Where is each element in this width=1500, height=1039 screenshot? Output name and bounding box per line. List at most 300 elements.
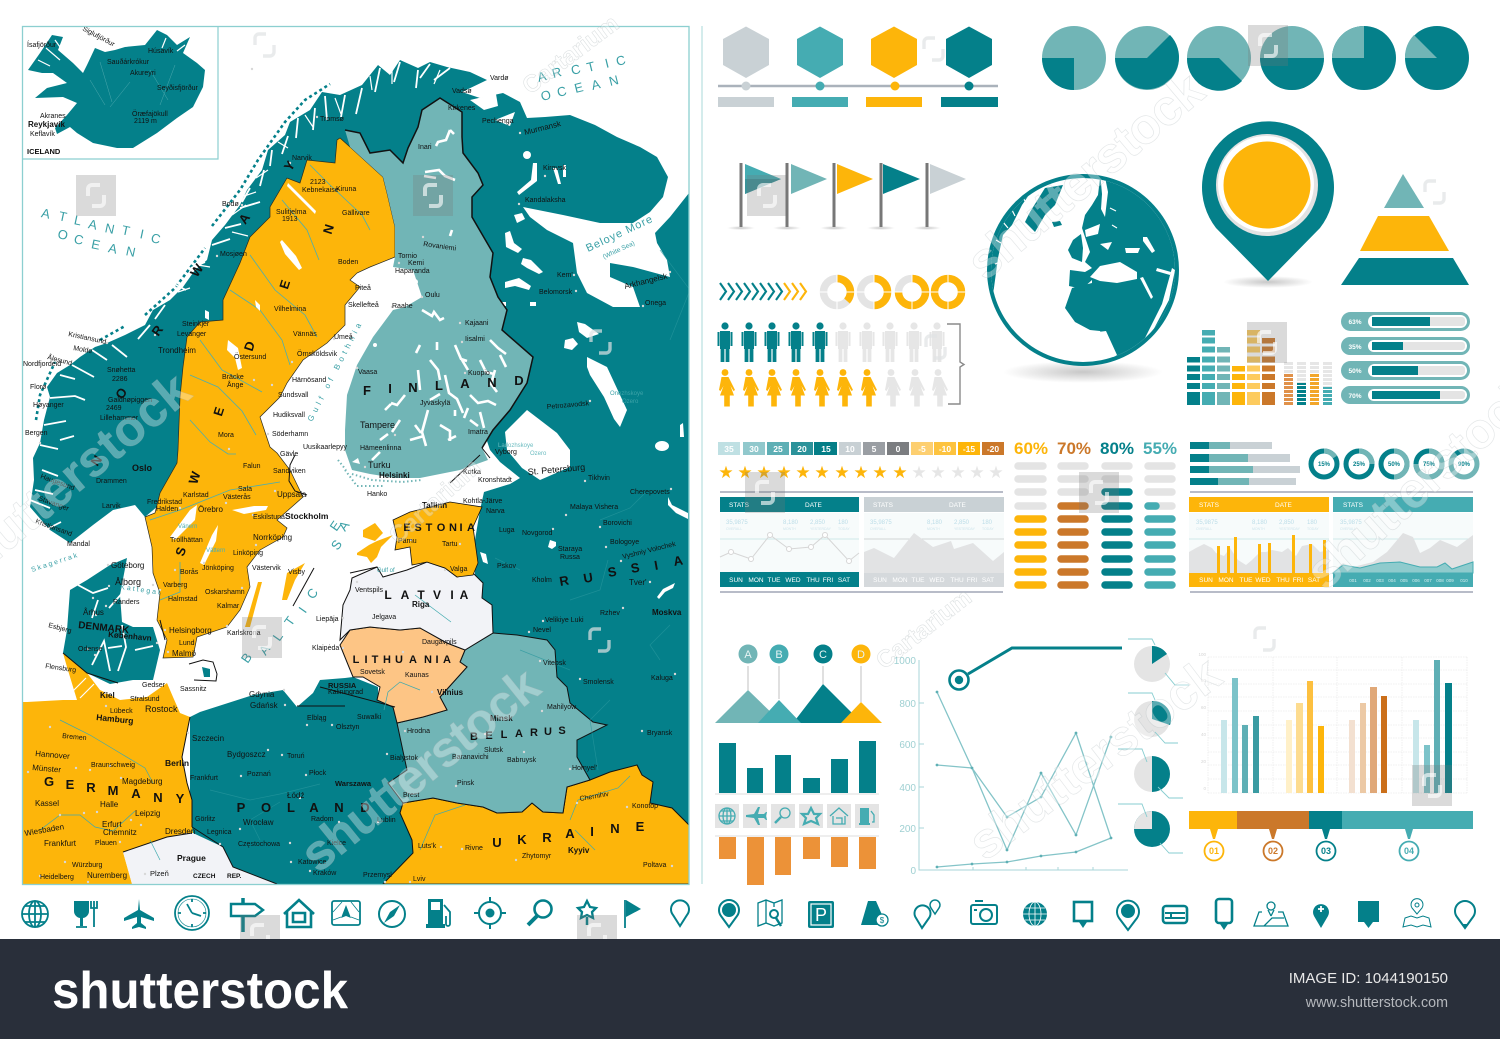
icon: pin outline xyxy=(671,900,689,926)
country labels: BELARUS xyxy=(470,725,566,743)
sea labels xyxy=(30,52,655,666)
city labels: Florø xyxy=(30,384,47,391)
inset labels: Seyðisfjörður xyxy=(157,84,199,92)
city labels: Härnösand xyxy=(292,377,326,384)
city labels: Warszawa xyxy=(335,779,372,788)
watermark: shutterstock xyxy=(958,645,1231,871)
temperature scale: 0 xyxy=(896,444,901,454)
vertical divider xyxy=(701,26,703,884)
inset frame xyxy=(23,27,218,159)
city labels: Plzeň xyxy=(150,869,169,878)
sea labels: BALTIC SEA xyxy=(238,518,353,666)
stat panel 1: line chart: OVERALL xyxy=(726,527,742,531)
Gotland and Oland xyxy=(245,563,305,627)
city labels: Velikiye Luki xyxy=(545,617,584,624)
city labels: Heidelberg xyxy=(40,874,74,881)
line chart xyxy=(894,648,1128,877)
city labels: Odense xyxy=(78,646,103,653)
progress bars: 35% xyxy=(1348,344,1362,351)
city labels: Høyanger xyxy=(33,402,64,409)
segmented timeline strip: 01 xyxy=(1209,846,1219,856)
globe shadow xyxy=(1003,361,1163,383)
city labels: Gdańsk xyxy=(250,701,279,710)
country labels: GERMANY xyxy=(44,774,185,806)
city labels: Nuremberg xyxy=(87,871,127,880)
star rating: ★★★★★★★★★★ xyxy=(718,463,908,482)
country labels: FINLAND xyxy=(363,373,524,398)
line chart: 400 xyxy=(899,783,916,794)
city labels: Eskilstuna xyxy=(253,514,285,521)
city labels: Falun xyxy=(243,463,261,470)
icon: folded map with magnifier xyxy=(758,900,782,926)
segmented timeline strip xyxy=(1189,811,1473,860)
city labels: Kemi xyxy=(408,260,424,267)
city labels: Staraya xyxy=(558,546,582,553)
stat panel 2: area chart: SAT xyxy=(982,577,994,584)
city labels: Liepāja xyxy=(316,616,339,623)
donut percentage row: 15% xyxy=(1318,462,1331,468)
city labels: Uppsala xyxy=(277,490,307,499)
icon: pin on map xyxy=(1403,899,1431,927)
Finnish border xyxy=(345,98,533,448)
inset labels: Ísafjörður xyxy=(27,40,57,49)
icon: map with person xyxy=(1254,902,1288,926)
bracket xyxy=(947,324,964,404)
city labels: Łódź xyxy=(287,791,304,800)
country labels: RUSSIA xyxy=(558,552,685,589)
grouped bar chart: 40 xyxy=(1201,732,1206,737)
sea labels: Kattegat xyxy=(120,584,162,597)
city labels: Borovichi xyxy=(603,520,632,527)
city labels: Luts'k xyxy=(418,843,437,850)
city labels: Östersund xyxy=(234,353,266,361)
rivers xyxy=(40,595,630,860)
watermark: Cartarium xyxy=(517,10,624,100)
city labels: Vännäs xyxy=(293,331,317,338)
icon: square marker xyxy=(1074,902,1092,928)
donut percentage row xyxy=(1311,451,1477,477)
stat panel 3: bar chart: 2,850 xyxy=(1279,520,1295,526)
city labels: Prague xyxy=(177,853,206,863)
sea labels: Skagerrak xyxy=(30,552,80,574)
city labels: Trondheim xyxy=(158,346,196,355)
icon: toll road: $ xyxy=(880,916,885,925)
country labels: UKRAINE xyxy=(492,819,645,850)
city labels: Narva xyxy=(486,508,505,515)
country labels: YAWRON xyxy=(87,158,298,469)
city labels: Halden xyxy=(156,506,178,513)
city labels: Inari xyxy=(418,144,432,151)
stat panel 3: bar chart: MON xyxy=(1218,577,1234,584)
segmented mini bars xyxy=(1288,361,1328,405)
percent headings: 70% xyxy=(1057,439,1091,458)
city labels: Dresden xyxy=(165,827,195,836)
city labels: Elbląg xyxy=(307,715,327,722)
city labels: Stockholm xyxy=(285,511,329,521)
city labels: Tromsø xyxy=(320,116,345,123)
icon: outlined round pin xyxy=(1455,901,1475,929)
city labels: Esbjerg xyxy=(47,622,72,635)
city labels: Leipzig xyxy=(135,809,160,818)
city labels: Murmansk xyxy=(523,119,563,137)
country labels: DENMARK xyxy=(78,620,130,636)
footer logo: shutterstock xyxy=(52,962,348,1020)
segmented timeline strip: 04 xyxy=(1404,846,1414,856)
city labels: Poznań xyxy=(247,771,271,778)
icon: compass xyxy=(379,901,405,927)
fjords and coastal cuts xyxy=(30,62,450,530)
timeline dots xyxy=(742,82,974,90)
star rating: ★★★★★ xyxy=(911,463,1004,482)
city labels: Baranavichi xyxy=(452,754,489,761)
chevron arrows xyxy=(720,283,806,300)
temperature scale: -20 xyxy=(987,444,999,454)
watermark: shutterstock xyxy=(290,656,550,883)
city labels: Kandalaksha xyxy=(525,197,566,204)
city labels: Minsk xyxy=(490,714,513,723)
stat panel 4: layered area chart: 006 xyxy=(1412,578,1420,583)
city labels: Boden xyxy=(338,259,358,266)
grouped bar chart xyxy=(1198,652,1467,793)
city labels: Brest xyxy=(403,792,419,799)
temperature scale: 30 xyxy=(749,444,759,454)
city labels: Pskov xyxy=(497,563,517,570)
Germany xyxy=(23,653,193,884)
stat panel 1: line chart: 2,850 xyxy=(810,520,826,526)
city labels: Halle xyxy=(100,800,119,809)
city labels: Ventspils xyxy=(355,587,384,594)
city labels: Zhytomyr xyxy=(522,853,552,860)
city labels: Magdeburg xyxy=(122,777,162,786)
city labels: Mandal xyxy=(67,541,90,548)
icon: target xyxy=(474,897,506,929)
line chart: 200 xyxy=(899,824,916,835)
Bornholm xyxy=(202,667,210,677)
people icons: women xyxy=(719,369,948,406)
borders xyxy=(63,448,490,884)
stat panel 2: area chart: MON xyxy=(892,577,908,584)
city labels: Kholm xyxy=(532,577,552,584)
city labels: Ålesund xyxy=(46,352,73,368)
Estonian islands xyxy=(357,523,393,563)
city labels: Rivne xyxy=(465,845,483,852)
inset labels xyxy=(27,25,199,156)
city labels: Wiesbaden xyxy=(24,822,65,838)
diverging bar chart with icons xyxy=(715,741,879,885)
city labels: Kyyiv xyxy=(568,846,590,855)
city labels: Olsztyn xyxy=(336,724,359,731)
city labels: Chernihiv xyxy=(579,791,610,803)
city labels: Sala xyxy=(238,486,252,493)
city labels: Kirkenes xyxy=(448,105,476,112)
city labels: Kuopio xyxy=(468,370,490,377)
city labels: Bryansk xyxy=(647,730,673,737)
segmented timeline strip: 02 xyxy=(1268,846,1278,856)
city labels: Haugesund xyxy=(39,473,75,492)
city labels: Bräcke xyxy=(222,374,244,381)
city labels: Pärnu xyxy=(398,538,417,545)
Finnish lakes xyxy=(372,130,506,460)
icon row xyxy=(22,896,1475,932)
stat panel 1: line chart: SUN xyxy=(729,577,743,584)
seas xyxy=(1085,172,1175,358)
inset labels: 2119 m xyxy=(134,118,157,125)
line chart: 1000 xyxy=(894,656,916,667)
city labels: Jelgava xyxy=(372,614,396,621)
stat panel 3: bar chart: YESTERDAY xyxy=(1279,527,1301,531)
stat panel 3: bar chart: DATE xyxy=(1275,502,1293,509)
timeline rule xyxy=(718,85,998,87)
city labels: Oulu xyxy=(425,292,440,299)
city labels: Kiel xyxy=(100,691,115,700)
footer url: www.shutterstock.com xyxy=(1305,995,1448,1011)
city labels: Belomorsk xyxy=(539,289,573,296)
sea labels: Vättern xyxy=(206,548,225,554)
sea labels: Onezhskoye xyxy=(610,391,644,397)
city labels: Sassnitz xyxy=(180,686,207,693)
stat panel 2: area chart: TODAY xyxy=(982,527,994,531)
inset labels: Reykjavík xyxy=(28,120,65,129)
city labels: Tampere xyxy=(360,420,395,430)
sea labels: OCEAN xyxy=(539,72,620,104)
inset labels: Siglufjörður xyxy=(81,25,117,49)
city labels: Varberg xyxy=(163,582,187,589)
percent headings xyxy=(1014,439,1177,458)
percent headings: 80% xyxy=(1100,439,1134,458)
icon: parking sign: P xyxy=(815,905,827,925)
stat panel 3: bar chart: STATS xyxy=(1199,502,1220,509)
stat panel 2: area chart: MONTH xyxy=(927,527,940,531)
stat panel 3: bar chart: FRI xyxy=(1293,577,1303,584)
city labels: Galdhøpiggen xyxy=(108,397,152,404)
icon: ticket card xyxy=(1163,906,1187,923)
percent headings: 55% xyxy=(1143,439,1177,458)
people icons: men xyxy=(718,322,944,362)
city labels: Oskarshamn xyxy=(205,589,245,596)
stat panel 3: bar chart: SUN xyxy=(1199,577,1213,584)
stat panel 2: area chart: 35,9875 xyxy=(870,520,892,526)
continents xyxy=(991,180,1175,356)
stat panel 2: area chart: STATS xyxy=(873,502,894,509)
stat panel 2: area chart xyxy=(864,497,1004,587)
sea labels: ATLANTIC xyxy=(40,205,162,247)
stat panel 4: layered area chart: 001 xyxy=(1349,578,1357,583)
city labels: Braunschweig xyxy=(91,762,135,769)
city labels: Larvik xyxy=(102,503,121,510)
city labels: Borås xyxy=(180,568,199,576)
hexagons xyxy=(723,26,992,78)
city labels: Riga xyxy=(412,600,430,609)
city labels: Vitebsk xyxy=(543,660,566,667)
city labels: Legnica xyxy=(207,829,232,836)
grouped bar chart: 80 xyxy=(1201,678,1206,683)
city labels: Rostock xyxy=(145,704,178,714)
country labels: RUSSIA xyxy=(328,681,357,690)
Ukraine xyxy=(383,765,689,884)
city labels: Przemysl xyxy=(363,872,392,879)
temperature scale: 5 xyxy=(872,444,877,454)
icon: camera xyxy=(971,901,997,924)
city labels: Karlskrona xyxy=(227,630,261,637)
city labels: Russa xyxy=(560,554,580,561)
small pie callouts xyxy=(1118,639,1189,853)
footer bar xyxy=(0,939,1500,1039)
city labels: Lübeck xyxy=(110,708,133,715)
city labels: Bologoye xyxy=(610,539,639,546)
city labels: Kirovsk xyxy=(543,165,566,172)
city labels: Helsingborg xyxy=(169,626,212,635)
city labels: Oslo xyxy=(132,463,153,473)
progress bars: 70% xyxy=(1348,393,1362,400)
stat panel 4: layered area chart: 007 xyxy=(1424,578,1432,583)
city labels: Imatra xyxy=(468,429,488,436)
temperature scale: 15 xyxy=(821,444,831,454)
Finnish coastal islands xyxy=(352,279,418,464)
stat panel 3: bar chart: MONTH xyxy=(1252,527,1265,531)
ring progress gauges xyxy=(819,274,966,310)
temperature scale: 20 xyxy=(797,444,807,454)
star rating xyxy=(718,463,1004,482)
city labels: Münster xyxy=(32,763,62,775)
icon: pin filled xyxy=(719,900,739,927)
city labels: Norrköping xyxy=(253,533,292,542)
city labels: Rzhev xyxy=(600,610,620,617)
city labels: Częstochowa xyxy=(238,841,280,848)
city labels: Vyborg xyxy=(495,449,517,456)
donut percentage row: 25% xyxy=(1353,462,1366,468)
city labels: 2286 xyxy=(112,376,128,383)
sea labels: Beloye More xyxy=(584,213,655,255)
stat panel 4: layered area chart: 008 xyxy=(1436,578,1444,583)
city labels: Örnsköldsvik xyxy=(297,350,338,358)
city labels: Kotka xyxy=(463,469,481,476)
inset labels: Akureyri xyxy=(130,70,156,77)
sea labels: Vänern xyxy=(178,524,197,530)
city labels: Tornio xyxy=(398,253,417,260)
stat panel 3: bar chart: SAT xyxy=(1308,577,1320,584)
timeline labels bars xyxy=(718,97,998,107)
stat panel 3: bar chart: WED xyxy=(1255,577,1271,584)
city labels: Babruysk xyxy=(507,757,537,764)
city labels: Helsinki xyxy=(379,471,410,480)
map panel: Baltic region xyxy=(23,25,690,884)
city labels: Kalmar xyxy=(217,603,240,610)
country labels: ESTONIA xyxy=(403,522,475,534)
temperature scale: 25 xyxy=(773,444,783,454)
city labels: 1913 xyxy=(282,216,298,223)
city labels: Västervik xyxy=(252,565,281,572)
country labels xyxy=(44,158,685,880)
city labels: Ålborg xyxy=(115,577,141,587)
Czech Republic xyxy=(123,833,277,884)
icon: filled square marker xyxy=(1358,901,1379,928)
city labels: Iisalmi xyxy=(465,336,485,343)
city labels: Tallinn xyxy=(422,501,447,510)
city labels: Bialystok xyxy=(390,755,419,762)
temperature scale: -5 xyxy=(918,444,926,454)
inset labels: Sauðárkrókur xyxy=(107,58,150,66)
city labels: Jyväskylä xyxy=(420,400,450,407)
city labels: Klaipėda xyxy=(312,645,339,652)
icon: glass and fork xyxy=(74,901,97,927)
city labels: Raahe xyxy=(392,303,413,310)
city labels: Örebro xyxy=(198,505,223,514)
pyramid xyxy=(1341,174,1469,285)
grouped bar chart: 20 xyxy=(1201,759,1206,764)
icon: solid globe xyxy=(1023,902,1047,926)
temperature scale: -15 xyxy=(963,444,975,454)
city labels: Suwalki xyxy=(357,714,382,721)
sea labels: ARCTIC xyxy=(536,52,627,85)
stat panel 1: line chart: TODAY xyxy=(838,527,850,531)
city labels: 2469 xyxy=(106,405,122,412)
city labels: Randers xyxy=(113,599,140,606)
city labels: Frankfurt xyxy=(44,839,77,848)
Latvia xyxy=(340,562,493,650)
line chart: 800 xyxy=(899,699,916,710)
city labels: Kajaani xyxy=(465,320,489,327)
icon: magnifier xyxy=(528,900,552,925)
callout ring and leader xyxy=(950,648,1122,690)
grouped bar chart: 0 xyxy=(1203,786,1206,791)
city labels: Lund xyxy=(179,640,195,647)
equalizer chart xyxy=(1194,330,1268,405)
stat panel 4: layered area chart: 003 xyxy=(1376,578,1384,583)
progress bars: 50% xyxy=(1348,368,1362,375)
icon: airplane xyxy=(124,897,154,929)
map frame xyxy=(22,26,689,884)
city labels: Sovetsk xyxy=(360,669,385,676)
city labels: Cherepovets xyxy=(630,489,670,496)
city labels: Bergen xyxy=(25,430,48,437)
city labels: Vaasa xyxy=(358,369,377,376)
icon: toll road xyxy=(861,901,888,926)
stat panel 3: bar chart: 35,9875 xyxy=(1196,520,1218,526)
stat panel 1: line chart: YESTERDAY xyxy=(810,527,832,531)
city labels: Radom xyxy=(311,816,334,823)
city labels: Göteborg xyxy=(111,561,144,570)
city labels: Hannover xyxy=(35,749,71,761)
city labels: Flensburg xyxy=(45,663,77,674)
stat panel 2: area chart: 8,180 xyxy=(927,520,943,526)
stat panel 3: bar chart: TUE xyxy=(1240,577,1253,584)
stat panel 2: area chart: THU xyxy=(950,577,964,584)
city labels: Lviv xyxy=(413,876,426,883)
offshore islands xyxy=(36,84,330,420)
city labels: Söderhamn xyxy=(272,431,308,438)
sea labels: Gulf of xyxy=(377,568,395,574)
percent pill columns xyxy=(1014,439,1177,585)
city labels: Pechenga xyxy=(482,118,514,125)
watermark: shutterstock xyxy=(956,61,1214,290)
city labels: Hudiksvall xyxy=(273,412,305,419)
stat panel 4: layered area chart: OVERALL xyxy=(1340,527,1356,531)
stat panel 3: bar chart: 180 xyxy=(1307,520,1318,526)
city labels: Bydgoszcz xyxy=(227,750,266,759)
city labels: Vardø xyxy=(490,75,509,82)
stat panel 1: line chart: 8,180 xyxy=(783,520,799,526)
stat panel 1: line chart: SAT xyxy=(838,577,850,584)
progress bars: 63% xyxy=(1348,319,1362,326)
city labels: Levanger xyxy=(177,331,207,338)
stat panel 1: line chart: 180 xyxy=(838,520,849,526)
stat panel 2: area chart: FRI xyxy=(967,577,977,584)
city labels: Uusikaarlepyy xyxy=(303,444,347,451)
city labels: Katowice xyxy=(298,859,327,866)
city labels: Vadsø xyxy=(452,88,472,95)
city labels: Hrodna xyxy=(407,728,430,735)
Sweden xyxy=(145,138,395,658)
